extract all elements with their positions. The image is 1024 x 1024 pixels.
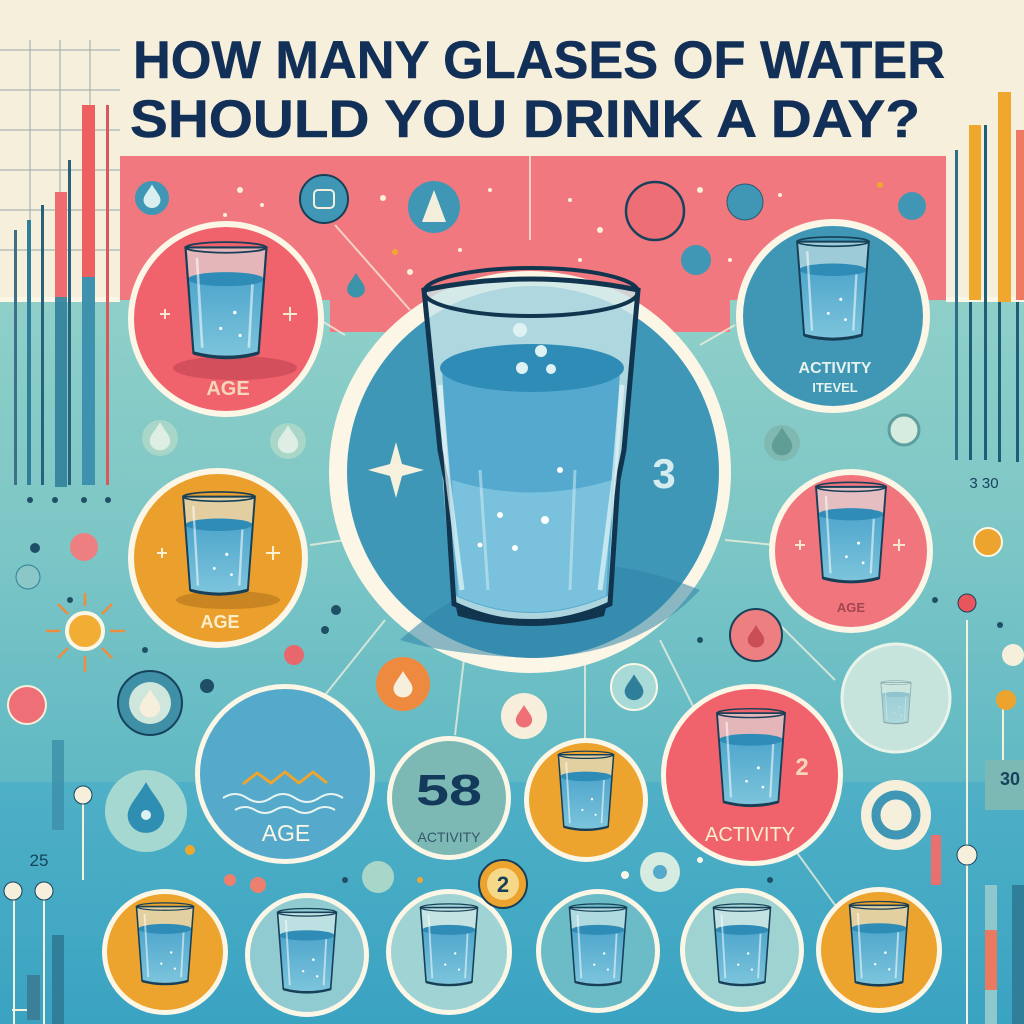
background: coral panel bbox=[120, 156, 946, 331]
axis ticks left bbox=[27, 497, 111, 503]
panel: activity level top right: ACTIVITY bbox=[799, 360, 872, 377]
title bbox=[130, 31, 945, 149]
badge: number 2 bbox=[479, 860, 527, 908]
panel: activity bottom right: ACTIVITY bbox=[705, 824, 795, 846]
icon: small ring centre bottom bbox=[362, 852, 680, 893]
panel: 58 activity: 58 bbox=[416, 766, 482, 815]
panel: age top left bbox=[128, 221, 324, 417]
panel: activity level top right bbox=[736, 219, 930, 413]
icon: sun bbox=[46, 593, 125, 672]
number on circle: 3 bbox=[652, 450, 676, 497]
panel: age top left: AGE bbox=[206, 378, 250, 400]
right slider chart bbox=[931, 594, 1024, 1024]
right bar chart bbox=[955, 92, 1024, 462]
bottom row of glasses bbox=[102, 887, 942, 1017]
icon: sparkle bbox=[368, 442, 424, 498]
background: lower blue band bbox=[0, 782, 1024, 1024]
glass circle 3 bbox=[386, 889, 512, 1015]
icons: water drops bbox=[16, 415, 1002, 665]
panel: faded glass circle bbox=[842, 644, 950, 752]
icon: drop circles centre row bbox=[376, 609, 782, 739]
number: 30: 30 bbox=[1000, 769, 1020, 789]
panel: age left: AGE bbox=[200, 612, 240, 632]
glass circle 2 bbox=[245, 893, 369, 1017]
icon: drop circle left bbox=[8, 671, 182, 735]
background: teal field bbox=[0, 300, 1024, 790]
large glass bbox=[424, 268, 638, 626]
central circle with large glass bbox=[329, 268, 731, 673]
left bar chart bbox=[0, 40, 120, 487]
panel: age with waves bbox=[195, 684, 375, 864]
icon: large blue drop bbox=[105, 770, 187, 852]
glass circle 4 bbox=[536, 889, 660, 1013]
glass circle 5 bbox=[680, 888, 804, 1012]
icon: ring bbox=[861, 780, 931, 850]
background: cream top band bbox=[0, 0, 1024, 300]
icons: top coral row bbox=[135, 175, 926, 297]
icons: confetti dots bbox=[30, 182, 1003, 893]
panel: age with waves: AGE bbox=[262, 820, 310, 846]
panel: age right bbox=[769, 469, 933, 633]
axis numbers right: 3 30 bbox=[969, 475, 999, 492]
left slider chart bbox=[4, 740, 92, 1024]
panel: activity bottom right bbox=[661, 684, 843, 866]
panel: activity level top right: ITEVEL bbox=[812, 380, 858, 395]
panel: age right: AGE bbox=[837, 600, 865, 615]
badge: number 2: 2 bbox=[497, 872, 509, 897]
panel: 58 activity bbox=[387, 736, 511, 860]
number: 25: 25 bbox=[30, 851, 48, 870]
panel: small orange glass bbox=[524, 738, 648, 862]
background: coral wedge behind centre bbox=[330, 296, 730, 332]
panel: activity bottom right: 2 bbox=[795, 754, 809, 781]
panel: 58 activity: ACTIVITY bbox=[417, 829, 481, 845]
panel: age left bbox=[128, 468, 308, 648]
title: HOW MANY GLASES OF WATER bbox=[133, 31, 945, 90]
glass circle 1 bbox=[102, 889, 228, 1015]
title: SHOULD YOU DRINK A DAY? bbox=[130, 90, 920, 149]
glass circle 6 bbox=[816, 887, 942, 1013]
